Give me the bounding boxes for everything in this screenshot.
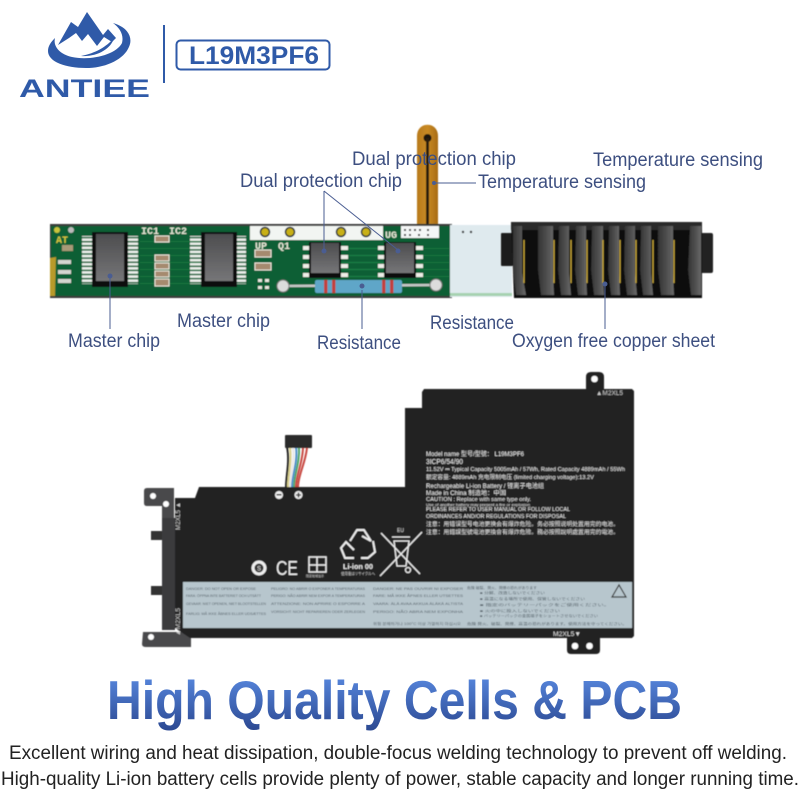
icon: KC mark: 限定地域当示 (306, 573, 324, 578)
battery body (175, 389, 634, 638)
warning label panel: 危険 発火、破裂、発煙、高温の恐れがあります。使用方法を守ってください。 (467, 621, 627, 626)
left brackets (144, 488, 174, 521)
icon: mountain (58, 12, 116, 46)
label: resistance: Resistance (317, 333, 401, 354)
warning label panel: ■ 指定のバッテリーパックをご使用ください。 (480, 602, 610, 607)
warning label panel: DANGER: DO NOT OPEN OR EXPOSE (186, 587, 257, 591)
PCB board (50, 224, 512, 298)
icon: warning triangle (612, 585, 626, 597)
divider (163, 25, 165, 83)
warning label panel: ■ 高温になる場所で使用、保管しないでください (480, 596, 586, 601)
warning label panel: FARLIG: MÅ IKKE ÅBNES ELLER UDSÆTTES (186, 611, 267, 616)
callout lines (110, 183, 605, 329)
white silkscreen strip (250, 226, 383, 240)
icon: safety circle: S (257, 566, 261, 572)
warning label panel: DANGER: NE PAS OUVRIR NI EXPOSER (373, 587, 464, 591)
spec text block: 11.52V ⎓ Typical Capacity 5005mAh / 57Wh, Rated Capacity 4889mAh / 55Wh (426, 467, 625, 473)
warning label panel: ■ 分解、改造しないでください (480, 590, 546, 595)
label: oxygen free copper sheet: Oxygen free copper sheet (512, 331, 716, 352)
silk labels: UP (255, 242, 267, 253)
spec text block: PLEASE REFER TO USER MANUAL OR FOLLOW LOCAL (426, 507, 570, 513)
spec text block: Rechargeable Li-ion Battery / 锂离子电池组 (426, 482, 544, 490)
logo: ANTIEE (19, 12, 150, 103)
warning label panel: ■ バッテリーパックの金属端子をショートさせないでください (480, 613, 599, 618)
spec text block: 额定容量: 4889mAh 充电限制电压 (limited charging voltage):13.2V (426, 473, 594, 481)
SMD parts (155, 236, 271, 286)
screw labels: M2XL5 ▲ (175, 502, 182, 530)
li-ion label: Li-ion 00 (343, 562, 373, 571)
warning label panel: 위험 분해하거나 100°C 이상 가열하지 마십시오 (373, 621, 461, 626)
silk labels: UG (385, 231, 397, 242)
master chip 2 (190, 232, 246, 287)
silk labels (56, 227, 397, 253)
label: master chip: Master chip (68, 331, 160, 352)
warning label panel (183, 582, 632, 628)
blades (513, 226, 701, 295)
label: resistance (upper): Resistance (430, 313, 514, 334)
icon: recycling (341, 530, 375, 558)
spec text block: 注意：用錯誤型號電池更換會有爆炸危險。務必按照說明處置用完的電池。 (426, 528, 619, 536)
spec text block (426, 450, 625, 536)
warning label panel: 危険 破裂、発火、発煙の恐れがあります (467, 585, 538, 590)
li-ion label: 使用後はリサイクルへ (341, 570, 375, 576)
icon: crossed-out bin: EU (397, 528, 404, 534)
icon: KC mark (306, 557, 326, 578)
light blank end of board (450, 225, 512, 297)
label: temperature sensing: Temperature sensing (478, 172, 646, 193)
spec text block: 3ICP6/54/90 (426, 459, 463, 466)
wire harness (285, 435, 312, 487)
icon: safety circle (252, 560, 266, 576)
silk labels: AT (56, 236, 68, 247)
warning label panel: FARE: MÅ IKKE ÅPNES ELLER UTSETTES (373, 593, 464, 598)
description text: Excellent wiring and heat dissipation, double-focus welding technology to prevent off welding. (9, 743, 787, 764)
spec text block: ORDINANCES AND/OR REGULATIONS FOR DISPOSAL (426, 514, 566, 520)
screw labels: ▲M2XL5 (596, 390, 623, 397)
screw labels: M2XL5▼ (553, 631, 581, 638)
test pads (260, 228, 370, 236)
icon: crossed-out bin (380, 528, 422, 576)
silk labels: Q1 (278, 242, 290, 253)
li-ion label (341, 562, 375, 576)
warning label panel: GEVAAR: NIET OPENEN, NIET BLOOTSTELLEN (186, 602, 267, 606)
spec text block: Made in China 制造地：中国 (426, 489, 506, 497)
icon: temperature flex cable (417, 125, 438, 226)
master chip 1 (82, 232, 138, 287)
icon: CE mark: CE (276, 558, 298, 580)
warning label panel: ■ 火の中に投入しないでください (480, 608, 561, 613)
label: master chip (upper): Master chip (177, 311, 270, 332)
polarity marks (275, 491, 302, 499)
mounting tabs (586, 372, 604, 390)
screw labels: ▲M2XL5 (175, 608, 182, 636)
wordmark: ANTIEE (19, 75, 150, 103)
resistor (277, 279, 442, 293)
warning label panel: VAARA: ÄLÄ AVAA AKKUA ÄLÄKÄ ALTISTA (373, 602, 464, 606)
dual protection chip 2 (378, 242, 423, 278)
spec text block: Use of another battery may present a fire or explosion (426, 503, 530, 507)
warning label panel: PERIGO: NÃO ABRA NEM EXPONHA (373, 609, 464, 614)
warning label panel: ATTENZIONE: NON APRIRE O ESPORRE A (271, 602, 366, 606)
silk labels: IC1 (141, 227, 159, 238)
left gold edge contacts (50, 257, 56, 296)
spec text block: Model name 型号/型號： L19M3PF6 (426, 450, 525, 458)
silk labels: IC2 (169, 227, 187, 238)
label: temperature sensing (upper): Temperature sensing (593, 150, 763, 171)
description text: High-quality Li-ion battery cells provide plenty of power, stable capacity and longer running time. (1, 769, 799, 790)
model badge: L19M3PF6 (189, 42, 319, 70)
warning label panel: PELIGRO: NO ABRIR O EXPONER A TEMPERATURAS (271, 587, 366, 591)
icon: swoosh (48, 23, 130, 68)
battery photo (142, 372, 634, 654)
title: High Quality Cells & PCB (107, 669, 682, 731)
description text (1, 743, 799, 790)
connector: oxygen free copper sheet (501, 222, 713, 298)
warning label panel: VORSICHT: NICHT REPARIEREN ODER ZERLEGEN (271, 610, 366, 614)
screw labels (175, 390, 623, 638)
spec text block: CAUTION : Replace with same type only. (426, 497, 531, 503)
label: dual protection chip (upper): Dual protection chip (352, 149, 516, 170)
traces (140, 240, 200, 285)
dual protection chip 1 (303, 242, 348, 278)
spec text block: 注意：用错误型号电池更换会有爆炸危险。务必按照说明处置用完的电池。 (426, 520, 619, 528)
label: dual protection chip: Dual protection chip (240, 171, 402, 192)
warning label panel: FARA: ÖPPNA INTE BATTERIET OCH UTSÄTT (186, 594, 261, 598)
warning label panel: PERIGO: NÃO ABRIR NEM EXPOR A TEMPERATURAS (271, 593, 366, 598)
copper contacts (524, 240, 674, 283)
